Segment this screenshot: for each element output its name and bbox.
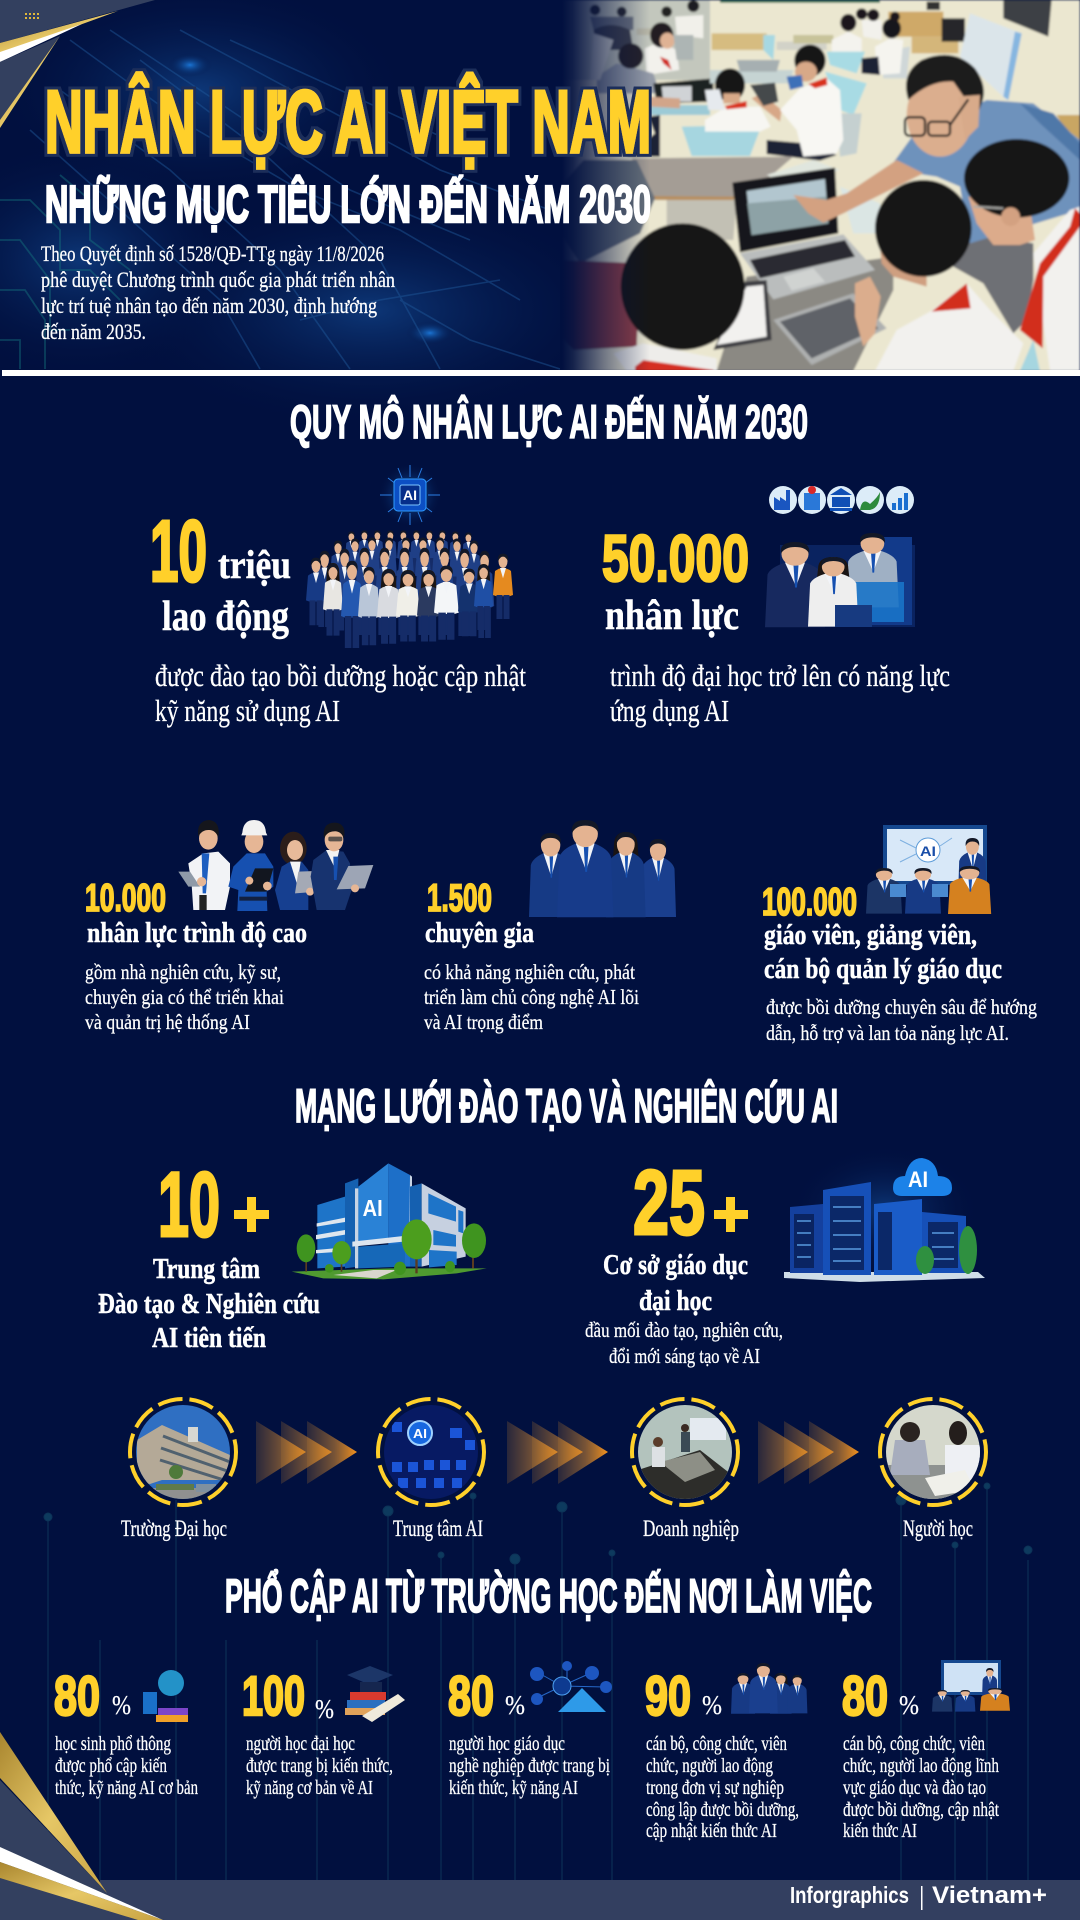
brand: Infographics Vietnam+ <box>790 1882 1047 1910</box>
unit: nhan luc: nhân lực <box>605 593 739 639</box>
icon: graduation cap and books <box>345 1666 405 1722</box>
stat: 80 percent students: học sinh phổ thông <box>55 1733 171 1755</box>
unit: trieu: triệu <box>218 542 291 587</box>
stat: 80 percent education workers <box>842 1660 1010 1842</box>
white divider bar <box>2 370 1080 376</box>
stat: 100 percent university learners: % <box>315 1694 334 1724</box>
stat: 80 percent education workers: kiến thức AI <box>843 1820 917 1842</box>
panel: 100,000 teachers <box>762 825 1037 1045</box>
brand: Infographics Vietnam+: Inforgraphics <box>790 1882 909 1908</box>
description: gồm nhà nghiên cứu, kỹ sư, <box>85 960 281 984</box>
node: enterprise <box>632 1399 739 1541</box>
panel: 50,000 personnel <box>602 486 915 639</box>
description: và quản trị hệ thống AI <box>85 1010 250 1034</box>
tablets <box>773 293 887 365</box>
description <box>766 995 1037 1045</box>
illustration: servers and AI cloud: AI <box>908 1167 928 1192</box>
stat: 100 percent university learners: được trang bị kiến thức, <box>246 1755 393 1777</box>
flow diagram: university to learner <box>121 1399 986 1541</box>
description: được bồi dưỡng chuyên sâu để hướng <box>766 995 1037 1019</box>
illustration: four professionals <box>178 820 373 911</box>
arrows 2 <box>507 1421 608 1484</box>
label: institutions <box>603 1249 748 1317</box>
stat: 90 percent public servants: trong đơn vị sự nghiệp <box>646 1777 784 1799</box>
stat: 90 percent public servants: cán bộ, công chức, viên <box>646 1733 787 1755</box>
boy center <box>875 283 1023 371</box>
node: AI center: Trung tâm AI <box>393 1516 483 1541</box>
intro paragraph <box>41 241 395 344</box>
corner ribbon top left <box>0 0 155 128</box>
back desks <box>710 70 793 83</box>
icon: globe and books <box>143 1670 188 1722</box>
panel: 10,000 high-level personnel <box>85 820 373 1034</box>
number: 1.500: 1.500 <box>427 877 492 920</box>
number: 10.000: 10.000 <box>85 877 166 920</box>
circuit board background <box>0 0 630 430</box>
node: enterprise: Doanh nghiệp <box>643 1516 739 1541</box>
stat: 90 percent public servants <box>645 1663 807 1842</box>
stat: 80 percent students: 80 <box>54 1664 100 1727</box>
title: NHÂN LỰC AI VIỆT NAM <box>45 72 651 171</box>
stat: 80 percent students: được phổ cập kiến <box>55 1755 167 1777</box>
node: university <box>121 1399 236 1541</box>
stat: 80 percent education workers: vực giáo dục và đào tạo <box>843 1777 986 1799</box>
number: 10: 10 <box>158 1154 220 1256</box>
description <box>85 960 284 1034</box>
laptop <box>732 168 838 252</box>
description: đầu mối đào tạo, nghiên cứu, <box>585 1318 783 1342</box>
description: chuyên gia có thể triển khai <box>85 985 284 1009</box>
icons: five sectors <box>769 486 914 514</box>
intro paragraph: đến năm 2035. <box>41 319 146 344</box>
stat: 80 percent students: % <box>112 1690 131 1720</box>
stat: 90 percent public servants: công lập được bồi dưỡng, <box>646 1799 799 1821</box>
icon: plus <box>714 1197 748 1232</box>
number: 100.000: 100.000 <box>762 881 857 924</box>
icon: teacher at screen <box>932 1660 1010 1712</box>
stat: 80 percent vocational learners: nghề nghiệp được trang bị <box>449 1755 610 1777</box>
node: AI center: AI <box>413 1426 427 1441</box>
number: 50.000: 50.000 <box>602 521 749 595</box>
illustration: AI building: AI <box>363 1195 383 1221</box>
stat: 80 percent vocational learners: kiến thức, kỹ năng AI <box>449 1777 578 1799</box>
icon: four officials <box>731 1663 807 1714</box>
number: 25: 25 <box>633 1152 705 1254</box>
stat: 100 percent university learners: kỹ năng cơ bản về AI <box>246 1777 373 1799</box>
arrows 3 <box>758 1421 859 1484</box>
label: institutions: đại học <box>639 1285 712 1317</box>
illustration: servers and AI cloud <box>784 1145 985 1282</box>
stat: 90 percent public servants: 90 <box>645 1664 691 1727</box>
text: 10 million description: kỹ năng sử dụng AI <box>155 693 340 728</box>
stat: 80 percent education workers: 80 <box>842 1664 888 1727</box>
illustration: AI building <box>292 1163 487 1279</box>
heading: teachers: giáo viên, giảng viên, <box>764 919 977 951</box>
boy B <box>767 140 837 161</box>
right back students <box>832 32 862 52</box>
text: 10 million description <box>155 658 526 728</box>
intro paragraph: Theo Quyết định số 1528/QĐ-TTg ngày 11/8/2026 <box>41 241 384 266</box>
panel: 25+ institutions <box>585 1145 985 1368</box>
teacher <box>953 233 1033 333</box>
stat: 80 percent students: thức, kỹ năng AI cơ bản <box>55 1777 198 1799</box>
heading: high-level personnel: nhân lực trình độ cao <box>87 917 307 949</box>
stat: 80 percent vocational learners: 80 <box>448 1664 494 1727</box>
number: 10: 10 <box>150 503 207 600</box>
brand: Infographics Vietnam+: Vietnam+ <box>932 1882 1047 1909</box>
subtitle: NHỮNG MỤC TIÊU LỚN ĐẾN NĂM 2030 <box>45 175 651 234</box>
text: 50,000 description <box>610 658 950 728</box>
illustration: teacher at AI screen: AI <box>920 843 936 859</box>
boy right <box>1033 207 1080 371</box>
description: đổi mới sáng tạo về AI <box>609 1344 760 1368</box>
stat: 80 percent vocational learners: % <box>505 1690 525 1720</box>
heading: teachers: cán bộ quản lý giáo dục <box>764 953 1002 985</box>
stat: 80 percent education workers: cán bộ, công chức, viên <box>843 1733 985 1755</box>
stat: 90 percent public servants: % <box>702 1690 722 1720</box>
heading: experts: chuyên gia <box>425 917 534 949</box>
description: triển làm chủ công nghệ AI lõi <box>424 985 639 1009</box>
stat: 80 percent vocational learners <box>448 1661 612 1799</box>
node: AI center <box>378 1399 484 1541</box>
text: 10 million description: được đào tạo bồi dưỡng hoặc cập nhật <box>155 658 526 693</box>
stat: 100 percent university learners: 100 <box>242 1664 305 1727</box>
node: university: Trường Đại học <box>121 1516 227 1541</box>
panel: 10 million workers <box>150 463 513 648</box>
arrows 1 <box>256 1421 357 1484</box>
decorative faint lines <box>44 1483 1032 1880</box>
label: centers: Đào tạo & Nghiên cứu <box>98 1288 320 1320</box>
intro paragraph: lực trí tuệ nhân tạo đến năm 2030, định hướng <box>41 293 377 318</box>
text: 50,000 description: trình độ đại học trở lên có năng lực <box>610 658 950 693</box>
icon: AI network and book <box>530 1661 612 1712</box>
lower table <box>632 157 793 198</box>
header banner <box>0 0 1080 384</box>
stat: 90 percent public servants: cập nhật kiến thức AI <box>646 1820 777 1842</box>
photo fade <box>560 0 652 370</box>
stat: 80 percent vocational learners: người học giáo dục <box>449 1733 565 1755</box>
description: có khả năng nghiên cứu, phát <box>424 960 635 984</box>
footer bar <box>0 1732 1080 1920</box>
panel: 1,500 experts <box>424 820 676 1034</box>
boy A <box>705 107 771 132</box>
node: learner <box>880 1399 986 1541</box>
icon: AI chip: AI <box>403 487 417 503</box>
back left group <box>582 0 711 82</box>
label: centers <box>98 1253 320 1354</box>
intro paragraph: phê duyệt Chương trình quốc gia phát triển nhân <box>41 267 395 292</box>
stat: 90 percent public servants: chức, người lao động <box>646 1755 773 1777</box>
description <box>424 960 639 1034</box>
text: 50,000 description: ứng dụng AI <box>610 693 729 728</box>
description: dẫn, hỗ trợ và lan tỏa năng lực AI. <box>766 1021 1009 1045</box>
corner ribbon bottom left <box>0 1732 163 1920</box>
illustration: teacher at AI screen <box>866 825 991 914</box>
icon: plus <box>234 1197 269 1232</box>
unit: lao dong: lao động <box>162 594 289 640</box>
stat: 100 percent university learners <box>242 1664 405 1799</box>
node: learner: Người học <box>903 1516 973 1541</box>
label: centers: AI tiên tiến <box>152 1322 266 1354</box>
panel: 10+ centers <box>98 1154 487 1354</box>
icon: AI chip <box>378 463 442 527</box>
stat: 80 percent education workers: chức, người lao động lĩnh <box>843 1755 999 1777</box>
stat: 80 percent students <box>54 1664 198 1799</box>
illustration: four suited experts <box>529 820 676 917</box>
label: centers: Trung tâm <box>153 1253 260 1285</box>
illustration: engineers and server <box>765 533 915 627</box>
stat: 100 percent university learners: người học đại học <box>246 1733 355 1755</box>
classroom photo <box>560 0 1080 371</box>
description <box>585 1318 783 1368</box>
illustration: crowd of workers <box>306 530 513 648</box>
label: institutions: Cơ sở giáo dục <box>603 1249 748 1281</box>
stat: 80 percent education workers: được bồi dưỡng, cập nhật <box>843 1799 999 1821</box>
description: và AI trọng điểm <box>424 1010 543 1034</box>
stat: 80 percent education workers: % <box>899 1690 919 1720</box>
boy left <box>613 343 717 371</box>
heading: teachers <box>764 919 1002 985</box>
